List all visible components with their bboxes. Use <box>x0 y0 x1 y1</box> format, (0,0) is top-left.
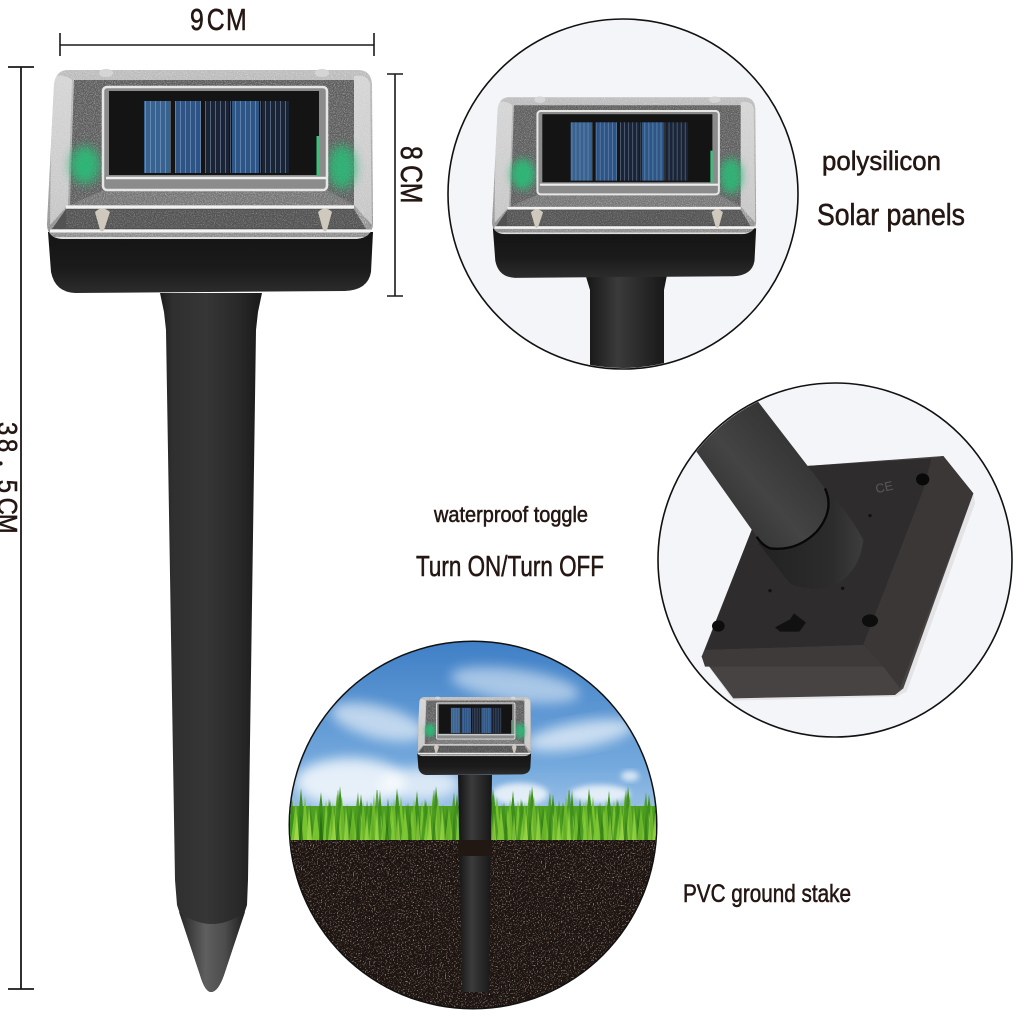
small solar head <box>417 697 531 775</box>
stake post <box>160 293 262 992</box>
angled tube <box>696 402 830 550</box>
dimension: width 9CM: 9CM <box>190 2 247 37</box>
dimension: depth 8CM: 8CM <box>394 146 429 203</box>
circle panel: underside with switch <box>658 357 1012 737</box>
close-up post <box>586 276 667 368</box>
grass <box>290 786 656 842</box>
label: waterproof toggle: Turn ON/Turn OFF <box>416 551 604 583</box>
circle panel: solar panel close-up <box>448 19 798 380</box>
dimension: width 9CM <box>60 2 374 56</box>
close-up solar head <box>492 96 756 278</box>
solar unit head <box>47 69 373 293</box>
dimension: height 38.5CM <box>0 67 34 989</box>
label: polysilicon solar panels: Solar panels <box>817 197 965 232</box>
label: polysilicon solar panels <box>817 146 965 232</box>
CE mark: CE <box>874 479 894 496</box>
dimension: depth 8CM <box>387 74 429 296</box>
label: polysilicon solar panels: polysilicon <box>822 146 941 176</box>
underside base plate <box>702 456 975 701</box>
small stake in the ground <box>458 775 492 992</box>
label: waterproof toggle: waterproof toggle <box>433 502 588 527</box>
circle panel: stake in lawn <box>288 640 658 1010</box>
main product: solar stake <box>47 69 373 992</box>
label: PVC ground stake: PVC ground stake <box>683 880 851 908</box>
collar <box>758 516 864 578</box>
sky with clouds <box>289 640 659 850</box>
soil <box>289 840 659 1015</box>
label: waterproof toggle <box>416 502 604 583</box>
